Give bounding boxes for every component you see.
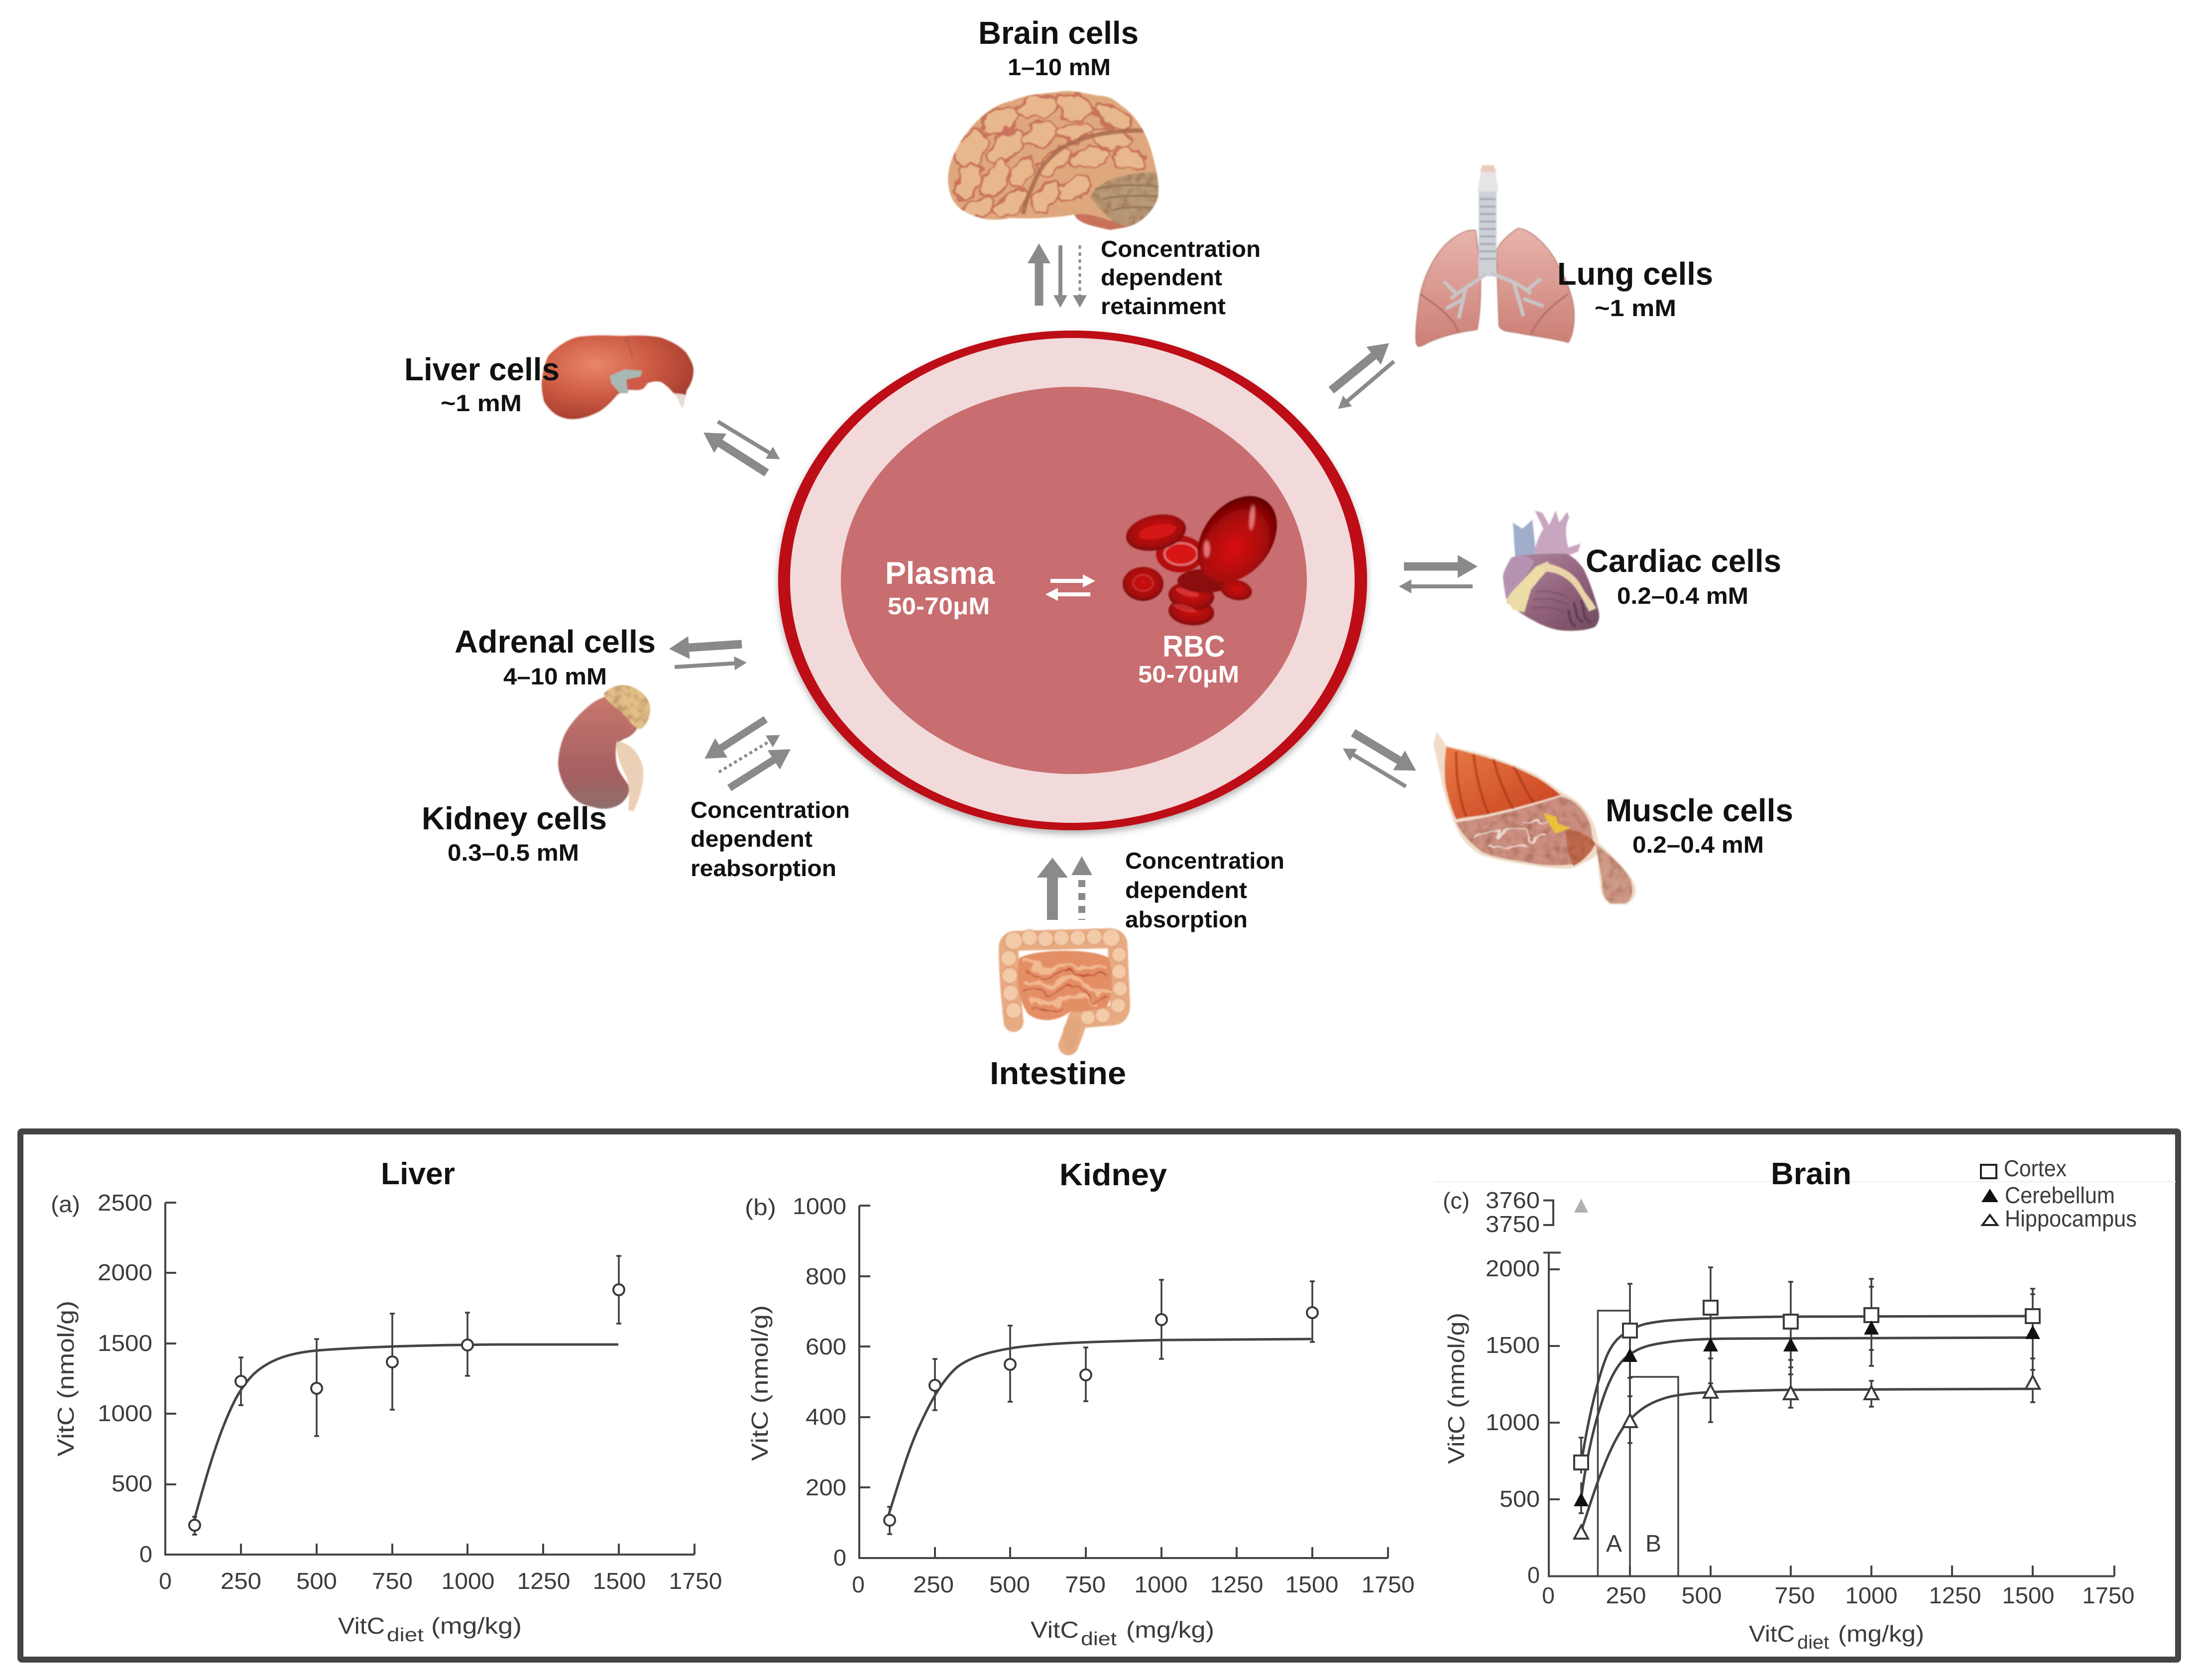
chart title: liver: Liver — [381, 1157, 455, 1191]
label: brain cells: Brain cells — [978, 15, 1139, 51]
y tick labels — [793, 1193, 846, 1570]
x tick labels — [852, 1571, 1415, 1597]
text: concentration dependent absorption: dependent — [1125, 877, 1247, 903]
axes and ticks — [165, 1203, 694, 1555]
arrows: liver exchange — [718, 422, 770, 473]
x tick labels: 500 — [989, 1571, 1030, 1597]
icon: lungs — [1416, 165, 1574, 346]
y tick labels: 1000 — [1486, 1409, 1540, 1435]
regions A and B — [1598, 1311, 1678, 1576]
y axis label: VitC (nmol/g) — [1443, 1313, 1469, 1464]
data points — [189, 1284, 624, 1531]
icon: red blood cells — [1123, 480, 1293, 627]
y tick labels: 1500 — [1486, 1332, 1540, 1358]
panel: dose response charts — [20, 1131, 2178, 1660]
label: adrenal cells: Adrenal cells — [455, 624, 656, 660]
regions A and B: B — [1645, 1531, 1661, 1557]
label: intestine: Intestine — [990, 1055, 1126, 1091]
panel: vitamin C tissue distribution diagram — [404, 15, 1793, 1091]
y tick labels: 2000 — [98, 1259, 152, 1285]
label: brain cells: 1–10 mM — [1008, 54, 1111, 80]
x tick labels: 500 — [1682, 1582, 1722, 1608]
label: cardiac cells: Cardiac cells — [1586, 543, 1781, 579]
x axis label: (mg/kg) — [431, 1613, 522, 1639]
panel frame — [20, 1131, 2178, 1660]
icon: brain — [943, 87, 1162, 234]
arrows: plasma to RBC exchange — [1050, 581, 1090, 594]
y tick labels: 0 — [833, 1545, 846, 1570]
fitted curve — [889, 1339, 1311, 1515]
icon: muscle — [1433, 732, 1636, 904]
chart: kidney — [745, 1158, 1415, 1650]
x axis label: (mg/kg) — [1838, 1621, 1924, 1647]
x axis label — [1031, 1617, 1214, 1650]
x tick labels: 1750 — [2082, 1582, 2135, 1608]
x tick labels: 1000 — [1134, 1571, 1188, 1597]
label: kidney cells: 0.3–0.5 mM — [448, 839, 579, 866]
arrows: adrenal exchange — [675, 644, 742, 667]
label: muscle cells: 0.2–0.4 mM — [1632, 831, 1764, 858]
label: muscle cells: Muscle cells — [1606, 792, 1793, 828]
label: lung cells: ~1 mM — [1595, 295, 1676, 321]
axes and ticks — [859, 1206, 1388, 1558]
panel tag (a): (a) — [51, 1191, 80, 1217]
label: lung cells — [1557, 256, 1713, 321]
x tick labels: 0 — [852, 1571, 865, 1597]
label: plasma: 50-70μM — [888, 593, 990, 620]
broken axis segment — [1543, 1201, 1553, 1225]
x axis label: diet — [1797, 1632, 1829, 1653]
arrows: muscle exchange — [1353, 733, 1406, 786]
label: plasma: Plasma — [885, 556, 995, 591]
chart title: brain: Brain — [1771, 1157, 1851, 1191]
y tick labels: 500 — [112, 1470, 152, 1496]
regions A and B: A — [1606, 1531, 1622, 1557]
x tick labels: 1500 — [1285, 1571, 1338, 1597]
fitted curve — [194, 1344, 618, 1520]
panel tag (b): (b) — [745, 1194, 776, 1220]
y axis label: VitC (nmol/g) — [53, 1301, 79, 1456]
x tick labels: 1000 — [441, 1568, 495, 1594]
y tick labels — [98, 1190, 152, 1567]
label: RBC: 50-70μM — [1138, 662, 1239, 688]
x tick labels: 1250 — [517, 1568, 571, 1594]
icon: kidney with adrenal gland — [558, 685, 650, 811]
data points — [884, 1307, 1318, 1526]
arrows: kidney reabsorption — [719, 719, 774, 788]
y tick labels: 1500 — [98, 1330, 152, 1356]
legend: Cortex — [2004, 1155, 2067, 1181]
icon: liver — [542, 336, 693, 419]
y tick labels: 3760 — [1486, 1187, 1540, 1213]
text: concentration dependent retainment: dependent — [1101, 264, 1222, 290]
y tick labels: 800 — [806, 1263, 846, 1289]
y tick labels: 600 — [806, 1334, 846, 1359]
x axis label: VitC — [1749, 1621, 1795, 1647]
x axis label — [1749, 1621, 1924, 1653]
x tick labels: 500 — [296, 1568, 337, 1594]
legend: Cerebellum — [2005, 1182, 2115, 1208]
y tick labels: 0 — [1527, 1562, 1540, 1588]
label: kidney cells: Kidney cells — [422, 800, 607, 836]
error bars — [887, 1280, 1315, 1534]
label: liver cells — [404, 351, 560, 416]
label: plasma — [885, 556, 995, 620]
arrows: intestinal absorption — [1037, 856, 1092, 920]
x tick labels: 0 — [1542, 1582, 1555, 1608]
x tick labels: 1750 — [1361, 1571, 1415, 1597]
y tick labels: 500 — [1500, 1486, 1540, 1512]
text: concentration dependent retainment: Concentration — [1101, 236, 1261, 262]
x tick labels: 750 — [1774, 1582, 1815, 1608]
x tick labels — [1542, 1582, 2135, 1608]
arrows: lung exchange — [1331, 355, 1394, 401]
fitted curve: cortex — [1581, 1316, 2033, 1464]
legend — [1981, 1155, 2137, 1232]
blood compartment circle — [778, 331, 1367, 830]
text: concentration dependent reabsorption: dependent — [691, 826, 812, 852]
error bars — [1579, 1267, 2035, 1538]
x tick labels: 0 — [159, 1568, 172, 1594]
text: concentration dependent reabsorption — [691, 797, 850, 881]
axes and ticks — [1543, 1252, 2114, 1576]
label: liver cells: Liver cells — [404, 351, 560, 387]
chart title: kidney: Kidney — [1059, 1158, 1167, 1192]
x tick labels: 250 — [913, 1571, 954, 1597]
x tick labels: 1500 — [592, 1568, 646, 1594]
x tick labels: 750 — [1065, 1571, 1106, 1597]
x tick labels: 250 — [221, 1568, 261, 1594]
label: cardiac cells — [1586, 543, 1781, 609]
data points: cortex — [1574, 1301, 2040, 1469]
y tick labels: 3750 — [1486, 1211, 1540, 1237]
label: RBC — [1138, 630, 1239, 688]
x axis label: (mg/kg) — [1126, 1617, 1214, 1643]
x axis label: VitC — [1031, 1617, 1079, 1643]
label: cardiac cells: 0.2–0.4 mM — [1617, 582, 1748, 609]
label: brain cells — [978, 15, 1139, 80]
arrows: cardiac exchange — [1404, 566, 1473, 586]
text: concentration dependent retainment — [1101, 236, 1261, 319]
fitted curve: cerebellum — [1581, 1338, 2033, 1499]
outlier marker — [1574, 1199, 1588, 1213]
legend: Hippocampus — [2005, 1206, 2137, 1232]
y tick labels: 2000 — [1486, 1255, 1540, 1281]
text: concentration dependent absorption: Concentration — [1125, 848, 1284, 874]
fitted curve: hippocampus — [1581, 1389, 2033, 1531]
label: muscle cells — [1606, 792, 1793, 858]
y tick labels: 1000 — [793, 1193, 846, 1219]
x tick labels: 1250 — [1929, 1582, 1981, 1608]
chart: brain — [1434, 1155, 2176, 1653]
y tick labels: 0 — [139, 1541, 152, 1567]
chart: liver — [51, 1157, 722, 1646]
x tick labels: 1000 — [1845, 1582, 1898, 1608]
x axis label: diet — [1081, 1629, 1117, 1650]
x axis label: diet — [387, 1625, 424, 1646]
y tick labels: 200 — [806, 1474, 846, 1500]
text: concentration dependent absorption — [1125, 848, 1284, 932]
label: RBC: RBC — [1162, 630, 1225, 663]
x axis label — [338, 1613, 522, 1646]
error bars — [192, 1256, 621, 1535]
panel tag (c): (c) — [1443, 1188, 1470, 1214]
x tick labels: 750 — [372, 1568, 413, 1594]
data points: hippocampus — [1574, 1376, 2040, 1539]
y tick labels: 2500 — [98, 1190, 152, 1216]
y tick labels — [1486, 1187, 1540, 1588]
arrows: brain retainment — [1039, 245, 1080, 306]
x tick labels: 1750 — [669, 1568, 722, 1594]
label: adrenal cells — [455, 624, 656, 689]
label: liver cells: ~1 mM — [441, 390, 522, 416]
label: lung cells: Lung cells — [1557, 256, 1713, 292]
text: concentration dependent reabsorption: Concentration — [691, 797, 850, 823]
text: concentration dependent absorption: absorption — [1125, 906, 1248, 932]
x axis label: VitC — [338, 1613, 385, 1639]
data points: cerebellum — [1574, 1321, 2040, 1506]
x tick labels: 1250 — [1210, 1571, 1264, 1597]
icon: heart — [1503, 510, 1599, 631]
y axis label: VitC (nmol/g) — [747, 1305, 773, 1461]
y tick labels: 400 — [806, 1404, 846, 1430]
icon: intestine — [1001, 929, 1128, 1052]
label: kidney cells — [422, 800, 607, 866]
x tick labels — [159, 1568, 722, 1594]
x tick labels: 1500 — [2002, 1582, 2054, 1608]
label: adrenal cells: 4–10 mM — [503, 663, 607, 689]
y tick labels: 1000 — [98, 1400, 152, 1426]
text: concentration dependent reabsorption: reabsorption — [691, 855, 836, 881]
text: concentration dependent retainment: retainment — [1101, 293, 1226, 319]
x tick labels: 250 — [1606, 1582, 1646, 1608]
